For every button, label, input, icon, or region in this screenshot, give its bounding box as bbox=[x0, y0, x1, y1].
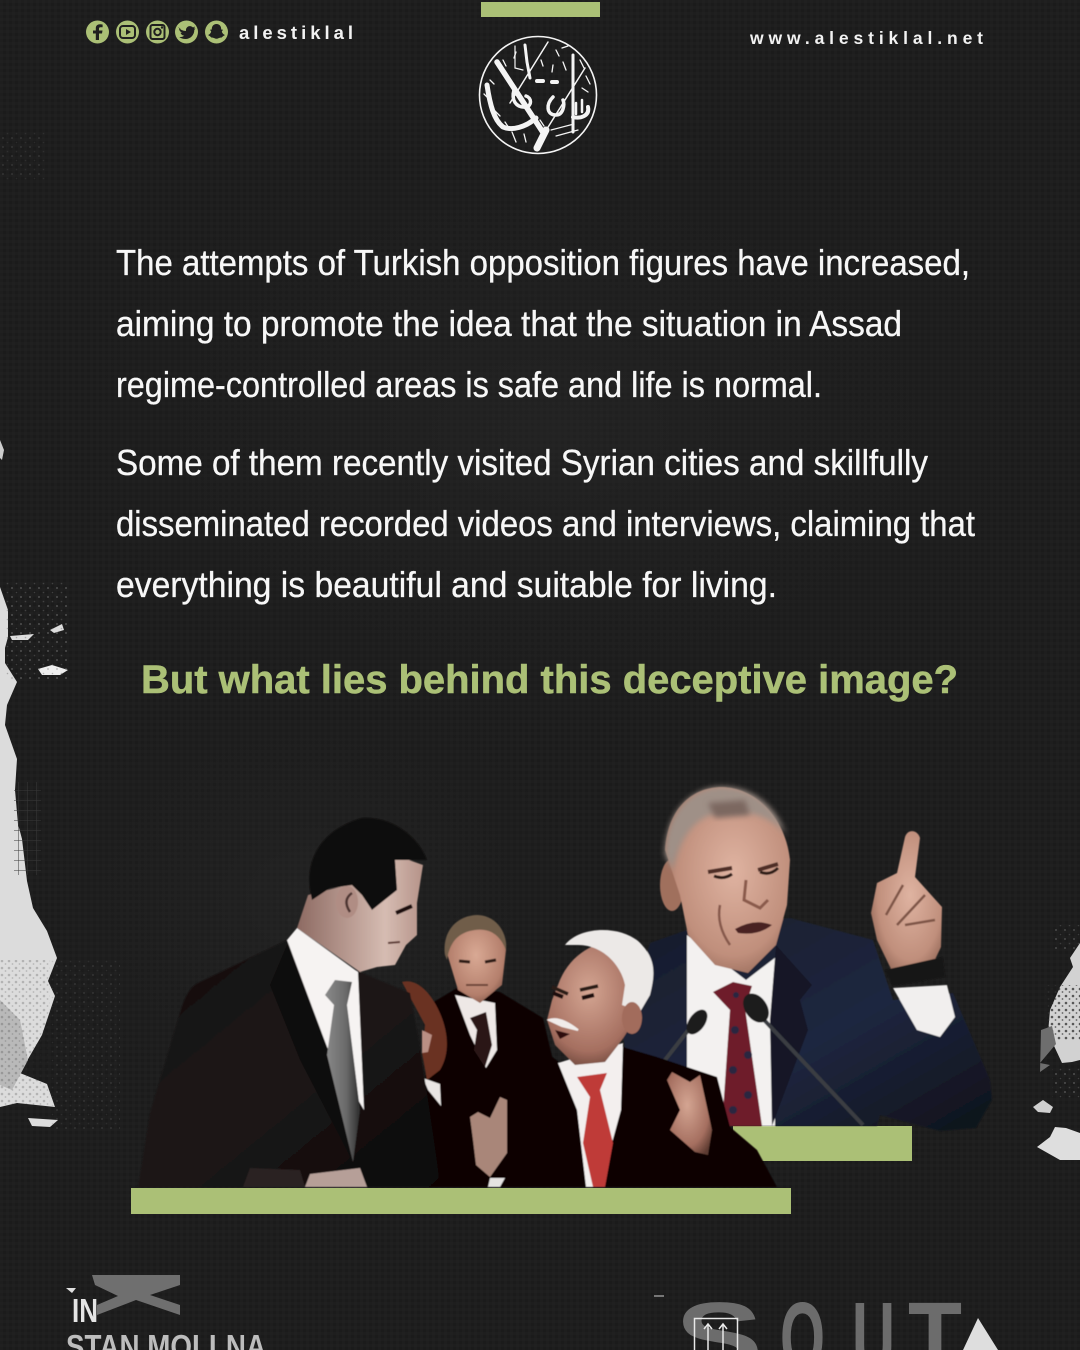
icon: youtube bbox=[116, 20, 139, 44]
distressed bottom-left print: IN bbox=[72, 1292, 98, 1329]
icon: facebook bbox=[86, 20, 109, 44]
right gesturing hand bbox=[667, 1072, 712, 1155]
icon: twitter bbox=[175, 20, 198, 44]
distressed bottom-left print bbox=[66, 1275, 266, 1350]
hair bbox=[309, 818, 427, 910]
figure: man with raised finger bbox=[623, 787, 992, 1131]
hand with raised finger bbox=[871, 831, 942, 973]
figure: white-haired man bbox=[440, 930, 777, 1187]
body text: second paragraph bbox=[116, 442, 975, 605]
shirt cuff bbox=[893, 985, 955, 1037]
brows, eyes and moustache bbox=[552, 986, 598, 994]
body text: first paragraph bbox=[116, 242, 970, 405]
tie bbox=[713, 982, 762, 1126]
rear green bar bbox=[733, 1126, 912, 1161]
lapels bbox=[770, 945, 812, 1126]
red tie bbox=[577, 1073, 613, 1187]
logo: calligraphic roundel bbox=[480, 36, 596, 154]
torn paper edge: left bbox=[0, 130, 120, 1130]
lapel shade bbox=[270, 945, 352, 1160]
figure: man in background with woman's hair bbox=[402, 915, 560, 1187]
shirt bbox=[558, 1043, 623, 1187]
distressed bottom-right print bbox=[654, 1282, 998, 1350]
ear and head bbox=[660, 859, 684, 911]
x mark bbox=[92, 1275, 180, 1315]
body text: second paragraph: disseminated recorded videos and interviews, claiming that bbox=[116, 503, 975, 544]
suit bbox=[440, 1047, 777, 1187]
neck and face bbox=[297, 855, 423, 972]
body text: second paragraph: everything is beautiful and suitable for living. bbox=[116, 564, 777, 605]
ear bbox=[336, 886, 358, 918]
microphones bbox=[750, 1005, 863, 1125]
body text: first paragraph: regime-controlled areas is safe and life is normal. bbox=[116, 364, 822, 405]
tie bbox=[325, 980, 360, 1162]
social media icons bbox=[86, 20, 228, 44]
green question heading: But what lies behind this deceptive image? bbox=[141, 658, 958, 702]
watch bbox=[885, 957, 945, 986]
icon: snapchat bbox=[205, 20, 228, 44]
icon: instagram bbox=[146, 20, 169, 44]
woman's red hair bbox=[402, 981, 447, 1080]
suit bbox=[623, 918, 992, 1131]
torn paper edge: right bbox=[1033, 925, 1080, 1160]
face bbox=[547, 942, 640, 1065]
top accent bar bbox=[481, 2, 600, 17]
white hair bbox=[565, 930, 653, 1012]
front green bar bbox=[131, 1188, 791, 1214]
icon: this-way-up box bbox=[694, 1318, 738, 1350]
brand name: alestiklal bbox=[239, 22, 353, 43]
website url: www.alestiklal.net bbox=[749, 28, 983, 48]
body text: first paragraph: The attempts of Turkish opposition figures have increased, bbox=[116, 242, 970, 283]
eye bbox=[396, 906, 412, 913]
body text: second paragraph: Some of them recently visited Syrian cities and skillfully bbox=[116, 442, 928, 483]
short hair bbox=[665, 787, 786, 870]
figure: man in dark suit in profile bbox=[138, 818, 440, 1187]
hand at jacket button bbox=[305, 1168, 367, 1187]
left gesturing hand bbox=[470, 1097, 507, 1177]
shirt bbox=[687, 935, 776, 1126]
shirt bbox=[287, 928, 364, 1110]
body text: first paragraph: aiming to promote the idea that the situation in Assad bbox=[116, 303, 902, 344]
white triangle bbox=[963, 1318, 998, 1350]
photo collage of four men bbox=[138, 787, 992, 1187]
facial features bbox=[708, 864, 778, 872]
